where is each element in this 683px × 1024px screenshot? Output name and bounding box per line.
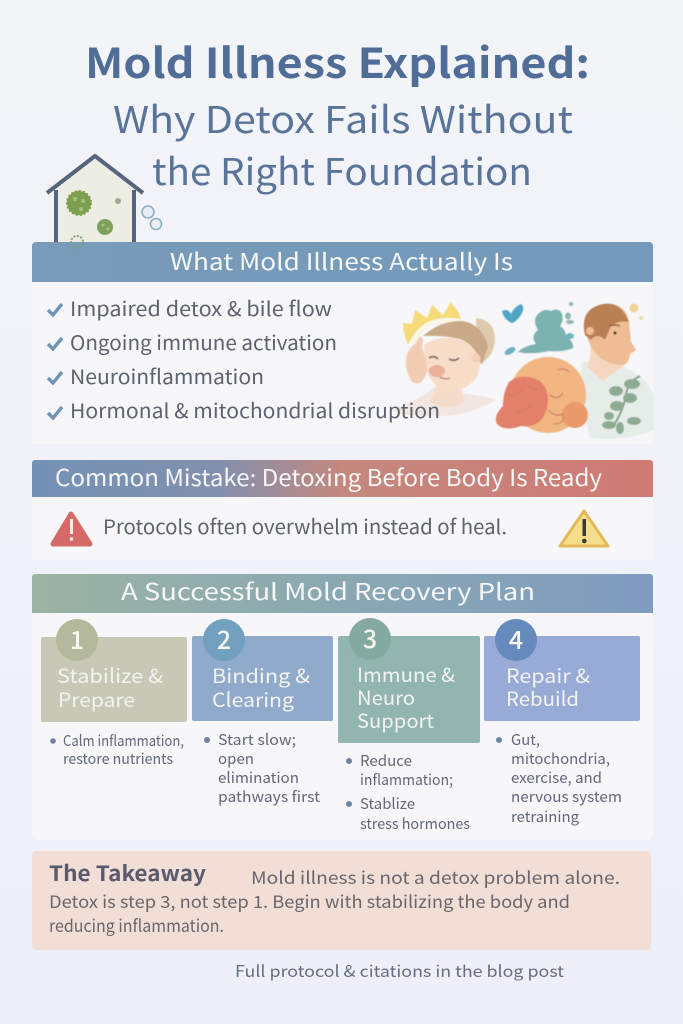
step 2: elimination [218, 767, 299, 788]
mold spores [67, 191, 121, 248]
footer note: Full protocol & citations in the blog post [235, 958, 564, 982]
step 4: mitochondria, [511, 748, 610, 769]
panel: common mistake [32, 459, 653, 560]
icon: yellow warning triangle [560, 511, 608, 546]
checklist: Hormonal & mitochondrial disruption [70, 395, 440, 424]
step 4: Rebuild [506, 683, 579, 712]
hair [423, 321, 488, 365]
step 4: retraining [511, 806, 580, 827]
step 1: Stabilize & [57, 660, 163, 689]
checklist: Impaired detox & bile flow [70, 293, 332, 322]
step 4 [484, 619, 640, 827]
title: Why Detox Fails Without [113, 90, 573, 144]
step 3: Support [357, 705, 435, 734]
section header: recovery plan [32, 573, 653, 613]
step 1: restore nutrients [63, 748, 173, 769]
blue heart [502, 304, 523, 323]
takeaway text [49, 864, 620, 937]
section header: common mistake: Common Mistake: Detoxing Before Body Is Ready [55, 459, 602, 493]
warning text: Protocols often overwhelm instead of heal. [103, 511, 507, 540]
step 1: Prepare [58, 684, 135, 713]
illustration: symptoms [392, 302, 654, 439]
step 4: Gut, [511, 729, 540, 750]
brain [510, 357, 586, 433]
panel: recovery plan [32, 573, 653, 840]
section header: recovery plan: A Successful Mold Recovery Plan [121, 573, 535, 607]
step 4: 4 [509, 621, 523, 657]
ponytail [476, 318, 495, 364]
step 2: Start slow; [218, 729, 296, 750]
crown of pain [403, 302, 461, 345]
takeaway text: reducing inflammation. [49, 912, 224, 937]
title: Mold Illness Explained: [85, 30, 590, 90]
section header: what mold illness is: What Mold Illness Actually Is [170, 243, 513, 277]
step 2: Clearing [212, 684, 294, 713]
step 2: 2 [217, 621, 231, 657]
step 2: pathways first [218, 786, 320, 807]
teal cloud [518, 310, 573, 353]
step 4: exercise, and [511, 767, 602, 788]
step 3: Reduce [360, 750, 412, 771]
step 1: Calm inflammation, [63, 730, 184, 751]
step 1 [41, 619, 187, 769]
bubbles [142, 206, 162, 230]
takeaway heading: The Takeaway [49, 858, 206, 888]
face [424, 338, 480, 391]
step 3 [338, 618, 480, 834]
takeaway text: Mold illness is not a detox problem alone. [251, 864, 620, 889]
step 2 [192, 619, 333, 807]
step 2: open [218, 748, 254, 769]
step 2: Binding & [212, 660, 310, 689]
takeaway text: Detox is step 3, not step 1. Begin with stabilizing the body and [49, 888, 570, 913]
man [581, 352, 654, 439]
step 1: 1 [70, 621, 84, 657]
icon: red warning triangle [53, 514, 90, 544]
woman shoulders [392, 386, 496, 416]
step 3: inflammation; [360, 769, 453, 790]
panel: the takeaway [32, 851, 651, 950]
icon: moldy house [47, 156, 162, 248]
step 3: 3 [363, 620, 377, 656]
step 4: nervous system [511, 786, 622, 807]
checklist: Ongoing immune activation [70, 327, 337, 356]
title [85, 30, 590, 196]
leaves [612, 376, 640, 428]
checklist: Neuroinflammation [70, 361, 264, 390]
step 4: Repair & [506, 660, 590, 689]
step 3: stress hormones [360, 813, 470, 834]
title: the Right Foundation [152, 142, 532, 196]
step 3: Neuro [357, 682, 415, 711]
panel: what mold illness actually is [32, 242, 654, 444]
hand [406, 336, 427, 383]
step 3: Stablize [360, 793, 415, 814]
step 3: Immune & [357, 659, 455, 688]
checklist [48, 293, 440, 424]
section header: what mold illness is [32, 242, 653, 282]
